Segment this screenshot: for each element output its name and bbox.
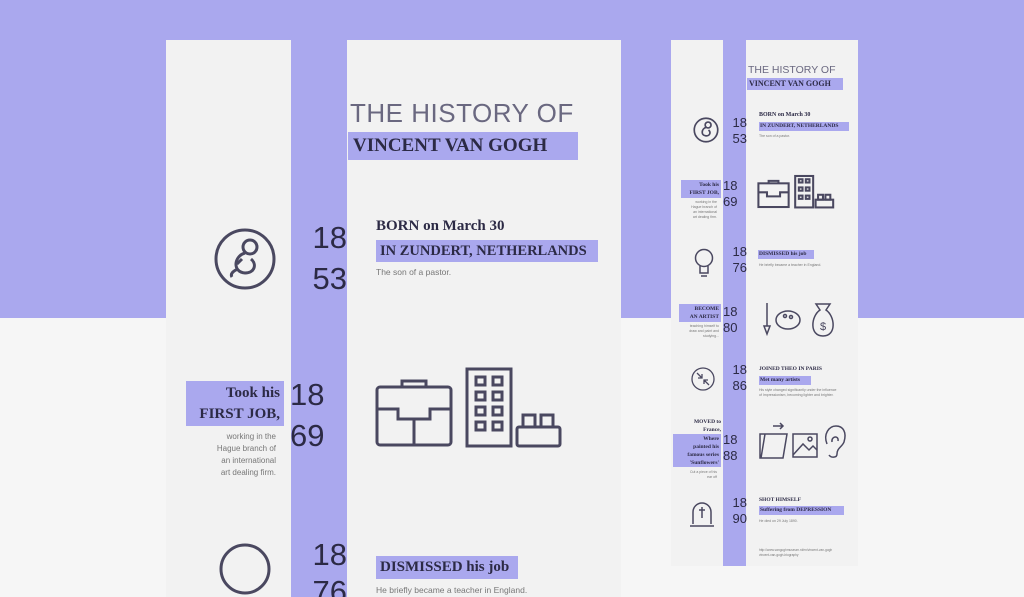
panel: small full infographic: SHOT HIMSELF (759, 497, 801, 503)
panel: small full infographic: 'Sunflowers' (690, 460, 719, 466)
1890 (690, 502, 714, 527)
subtitle (747, 78, 843, 90)
panel: small full infographic: teaching himself to (690, 324, 719, 328)
panel: small full infographic: 69 (723, 194, 737, 209)
year 1853: 18 (733, 115, 747, 130)
subtitle (348, 132, 578, 160)
panel: small full infographic: 18 (733, 244, 747, 259)
panel: small full infographic: Met many artists (760, 377, 800, 383)
text: hague (217, 432, 276, 477)
band (723, 40, 746, 566)
title: THE HISTORY OF (748, 64, 836, 76)
panel: small full infographic (671, 40, 858, 566)
text: hague: an international (221, 456, 276, 465)
highlight: zundert: IN ZUNDERT, NETHERLANDS (380, 243, 587, 259)
panel: main infographic (166, 40, 621, 597)
band (291, 40, 347, 597)
panel: small full infographic: working in the (695, 200, 717, 204)
panel: small full infographic: JOINED THEO IN PARIS (759, 366, 822, 372)
1869 (681, 180, 721, 198)
panel: small full infographic: DISMISSED his job (759, 251, 806, 257)
highlight: first job: Took his (226, 385, 280, 401)
year 1869: 69 (290, 418, 324, 453)
panel: small full infographic: famous series (687, 452, 719, 458)
panel: small full infographic: 18 (723, 432, 737, 447)
text: born: BORN on March 30 (759, 112, 810, 118)
text: hague: art dealing firm. (221, 468, 276, 477)
icon: fetus (693, 117, 719, 143)
1888: MOVED to (694, 419, 721, 425)
1888 (694, 419, 721, 433)
1880 (679, 304, 721, 322)
panel: small full infographic: $ (820, 321, 826, 333)
panel: small full infographic: 18 (733, 362, 747, 377)
text: hague: working in the (227, 432, 276, 441)
year 1869 (290, 377, 324, 453)
year 1853 (313, 220, 347, 296)
year 1853: 53 (313, 261, 347, 296)
year 1876: 18 (313, 537, 347, 572)
panel: small full infographic: of Impressionism, becoming lighter and brighter. (759, 393, 834, 397)
panel: small full infographic: Cut a piece of his (690, 470, 717, 474)
highlight: zundert (376, 240, 598, 262)
icon: bulb (220, 544, 270, 594)
1886 (691, 367, 715, 391)
panel: small full infographic: 90 (733, 511, 747, 526)
subtitle: VINCENT VAN GOGH (749, 79, 831, 88)
1869: FIRST JOB, (689, 190, 719, 196)
panel: small full infographic: IN ZUNDERT, NETHERLANDS (760, 123, 838, 129)
year 1876 (313, 537, 347, 597)
panel: small full infographic: He briefly became a teacher in England. (759, 263, 821, 267)
panel: small full infographic: Suffering from DEPRESSION (760, 507, 831, 513)
panel: small full infographic: 88 (723, 448, 737, 463)
source note: vincent-van-gogh-biography (759, 553, 799, 557)
1888: France, (703, 427, 721, 433)
panel: small full infographic: His style changed significantly under the influence (759, 388, 836, 392)
panel: small full infographic: 86 (733, 378, 747, 393)
background top purple (0, 0, 1024, 318)
1876 (694, 248, 714, 277)
highlight: first job: FIRST JOB, (199, 406, 280, 422)
panel: small full infographic: ear off (707, 475, 717, 479)
panel: small full infographic: 76 (733, 260, 747, 275)
year 1853: 53 (733, 131, 747, 146)
panel: small full infographic: 18 (723, 304, 737, 319)
panel: small full infographic: He died on 29 July 1890. (759, 519, 798, 523)
text: hague: Hague branch of (217, 444, 276, 453)
year 1853: 18 (313, 220, 347, 255)
icons: briefcase building lego (376, 368, 562, 448)
panel: small full infographic: art dealing firm. (693, 215, 717, 219)
text: son of pastor: The son of a pastor. (376, 267, 451, 277)
year 1853 (733, 115, 747, 146)
title: THE HISTORY OF (350, 98, 574, 128)
panel: small full infographic: 18 (723, 178, 737, 193)
1880: AN ARTIST (690, 314, 719, 320)
source note (759, 548, 832, 557)
1880: BECOME (695, 306, 719, 312)
text: born: BORN on March 30 (376, 218, 504, 234)
year 1869: 18 (290, 377, 324, 412)
subtitle: VINCENT VAN GOGH (353, 135, 547, 156)
panel: small full infographic: draw and paint and (689, 329, 719, 333)
highlight: dismissed: DISMISSED his job (380, 559, 509, 575)
panel: small full infographic: 18 (733, 495, 747, 510)
panel: small full infographic: painted his (693, 444, 719, 450)
panel: small full infographic: Hague branch of (691, 205, 717, 209)
panel: small full infographic: studying... (703, 334, 719, 338)
highlight: first job (186, 381, 284, 426)
source note: http://www.vangoghmuseum.nl/en/vincent-van-gogh (759, 548, 832, 552)
highlight: dismissed (376, 556, 518, 579)
panel: small full infographic: 80 (723, 320, 737, 335)
text: teacher: He briefly became a teacher in England. (376, 585, 527, 595)
icon: fetus (214, 228, 276, 290)
panel: small full infographic: The son of a pastor. (759, 134, 790, 138)
1869: Took his (699, 182, 719, 188)
panel: small full infographic: Where (703, 436, 719, 442)
panel: small full infographic: an international (693, 210, 717, 214)
